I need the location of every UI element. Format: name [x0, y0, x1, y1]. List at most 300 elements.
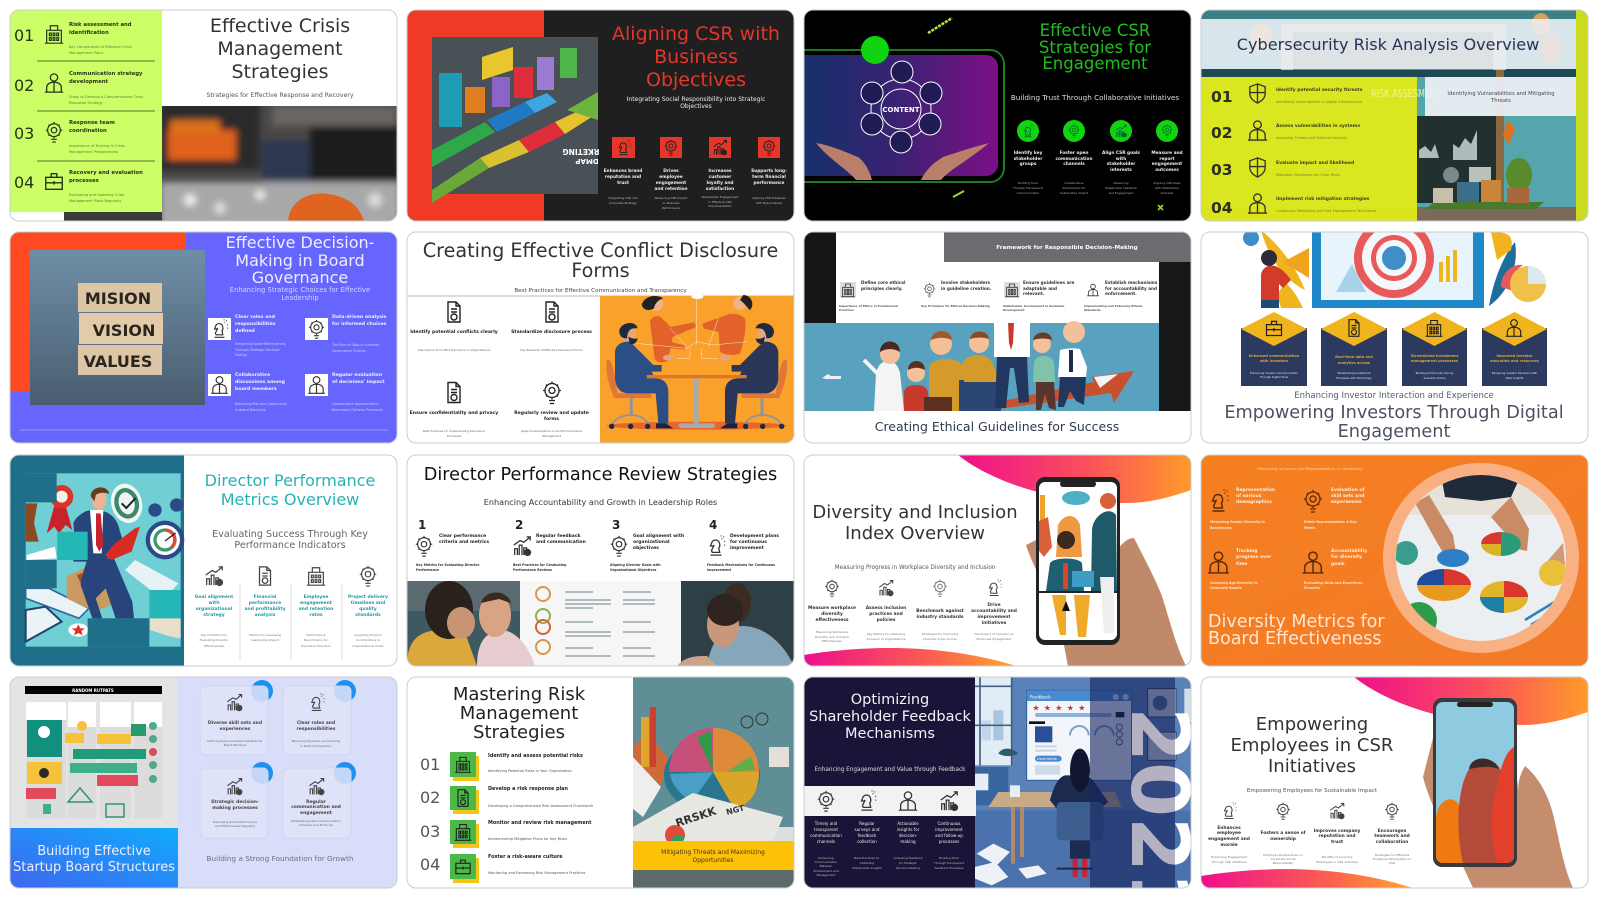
- panel: lime list column: [10, 10, 162, 221]
- item 03: 03: [1211, 161, 1233, 179]
- column 1: Enhancing Engagement: [1211, 855, 1247, 859]
- panel: Empowering Investors Through Digital Engagement: [1201, 218, 1588, 443]
- title: Effective Decision-: [226, 233, 374, 252]
- benefit 3: Implementation: [709, 204, 732, 208]
- strategy 2: Collaborative: [1064, 181, 1084, 185]
- title: Mastering Risk: [453, 684, 585, 705]
- item 2: Ethnic Representation: A Key: [1304, 520, 1357, 524]
- photo: wooden blocks mission vision values: VISION: [93, 321, 155, 340]
- benefit 2: on Business: [662, 201, 680, 205]
- benefit 3: satisfaction: [706, 186, 734, 192]
- column 2: Fosters a sense of: [1260, 831, 1306, 836]
- benefit 1: reputation and: [605, 174, 641, 180]
- glass card 4: [283, 762, 356, 838]
- photo: wooden blocks mission vision values: VALUES: [84, 352, 152, 371]
- item 03: [420, 820, 592, 848]
- column 1: Management: [816, 873, 836, 877]
- list item 03: Management Preparedness: [69, 150, 118, 154]
- list item 02: 02: [14, 76, 34, 95]
- step 2: [513, 518, 586, 572]
- column 1: [808, 580, 856, 643]
- strategy 2: Sustainable Impact: [1060, 191, 1089, 195]
- item 1: of various: [1236, 493, 1262, 499]
- metric 1: Evaluating Director: [200, 638, 229, 642]
- column 4: Strategies for Effective: [1375, 853, 1409, 857]
- feature card 4: Data Insights: [1506, 376, 1524, 380]
- item 1: demographics: [1236, 499, 1272, 505]
- item 1: Identify potential conflicts clearly: [410, 329, 498, 335]
- strategy 1: Identify key: [1014, 151, 1042, 156]
- subtitle box: Threats: [1490, 98, 1511, 104]
- step 1: criteria and metrics: [439, 539, 489, 545]
- glass card 1: experiences: [220, 726, 251, 732]
- column 3: [916, 580, 964, 641]
- step 2: 2: [515, 518, 523, 532]
- item 02: Assess vulnerabilities in systems: [1276, 123, 1360, 129]
- hand holding phone: [1026, 477, 1186, 666]
- glass card 4: communication and: [291, 804, 341, 810]
- benefit 4: Aligning CSR Initiatives: [752, 196, 786, 200]
- subtitle: Objectives: [680, 103, 712, 110]
- panel: Director Performance Review Strategies: [407, 455, 794, 666]
- strategy 4: Aligning CSR Goals: [1153, 181, 1181, 185]
- column 4: The Impact of Inclusion on: [974, 632, 1014, 636]
- item 01: 01: [1211, 88, 1233, 106]
- column 4: Encourages: [1378, 829, 1406, 834]
- benefit 2: employee: [659, 174, 683, 180]
- column 3: Employees in CSR Activities: [1316, 860, 1358, 864]
- illustration: woman reviewing feedback screen: Feedback: [1030, 695, 1051, 701]
- item 3: [208, 372, 287, 412]
- column 2: Inclusion in Organizations: [867, 637, 906, 641]
- item 4: for accountability and: [1105, 286, 1157, 291]
- column 3: [894, 821, 923, 870]
- column 3: trust: [1331, 839, 1343, 845]
- metric 3: [299, 568, 333, 648]
- column 2: feedback: [858, 833, 877, 838]
- glass card 4: Channels and Protocols: [299, 823, 333, 827]
- strategy 4: [1151, 120, 1183, 195]
- benefit 3: Increases: [708, 169, 732, 174]
- subtitle: Performance Indicators: [234, 540, 346, 551]
- benefit 4: with Brand Values: [756, 201, 783, 205]
- step 2: and communication: [536, 539, 586, 545]
- feature card 3: management processes: [1411, 359, 1458, 363]
- metric 4: Project delivery: [348, 595, 388, 600]
- list item 03: 03: [14, 124, 34, 143]
- list item 01: 01: [14, 26, 34, 45]
- column 4: Feedback Processes: [935, 866, 964, 870]
- column 3: Analyzing Feedback: [894, 856, 922, 860]
- column 2: Best Practices for: [854, 856, 880, 860]
- step 1: Key Metrics for Evaluating Director: [416, 563, 479, 567]
- step 1: Performance: [416, 568, 439, 572]
- hub diagram on gradient panel with hands: CONTENT: [882, 106, 920, 114]
- item 2: Standardize disclosure process: [511, 329, 592, 335]
- metric 3: Performance: [306, 633, 326, 637]
- list item 01: Risk assessment and: [69, 22, 132, 28]
- benefit 3: loyalty and: [707, 180, 733, 186]
- title: Director Performance Review Strategies: [424, 465, 777, 485]
- column 3: making: [900, 839, 916, 844]
- benefit 2: engagement: [656, 180, 686, 186]
- column 2: [852, 821, 882, 870]
- item 04: 04: [1211, 199, 1233, 217]
- item 3: adaptable and: [1023, 286, 1057, 291]
- title: Board Effectiveness: [1208, 629, 1381, 649]
- item 04: Implement risk mitigation strategies: [1276, 196, 1370, 202]
- list item 03: coordination: [69, 128, 107, 134]
- feature card 4: education and resources: [1490, 359, 1539, 363]
- title: Making in Board: [235, 251, 365, 270]
- step 4: for continuous: [730, 539, 767, 545]
- feature card 1: Enhanced communication: [1249, 354, 1299, 358]
- item 1: Boardrooms: [1210, 526, 1232, 530]
- item 4: [305, 372, 385, 412]
- title block: Startup Board Structures: [13, 860, 175, 875]
- strategy 2: channels: [1063, 161, 1085, 167]
- feature card 3: Investors Online: [1424, 376, 1446, 380]
- title: Mechanisms: [845, 726, 935, 742]
- benefit 3: customer: [709, 174, 732, 180]
- item 2: Involve stakeholders: [941, 280, 990, 285]
- title: Management: [217, 38, 343, 60]
- benefit 3: [702, 137, 739, 208]
- panel: Director Performance Metrics Overview: [10, 455, 397, 666]
- item 03: Evaluate impact and likelihood: [1276, 160, 1354, 166]
- title: Aligning CSR with: [612, 23, 780, 45]
- feature card 3: Building Community Among: [1416, 371, 1453, 375]
- yellow caption band: Opportunities: [693, 857, 733, 864]
- metric 4: timelines and: [351, 600, 385, 606]
- strategy 3: and Engagement: [1109, 191, 1134, 195]
- metric 4: Organizational Goals: [352, 644, 384, 648]
- feature card 2: [1321, 312, 1387, 386]
- column 1: Effectiveness: [822, 639, 842, 643]
- step 4: Feedback Mechanisms for Continuous: [707, 563, 775, 567]
- strategy 3: [1102, 120, 1140, 195]
- yellow caption band: [633, 841, 794, 870]
- illustration: monitor with target and megaphone: [1243, 218, 1546, 308]
- column 4: Drive: [987, 603, 1001, 608]
- item 1: [1210, 487, 1275, 530]
- title: Optimizing: [851, 692, 929, 708]
- item 3: Collaborative: [235, 373, 270, 378]
- item 3: in Board Decisions: [235, 408, 266, 412]
- title block: [10, 828, 178, 888]
- column 2: ownership: [1270, 836, 1296, 842]
- strategy 1: stakeholder: [1014, 156, 1043, 162]
- benefit 3: Stakeholder Engagement: [702, 195, 738, 199]
- column 3: [1314, 804, 1361, 864]
- item 1: Enhancing Board Effectiveness: [235, 342, 286, 346]
- subtitle: Measuring Inclusion and Representation in Leadership: [1257, 466, 1363, 471]
- item 1: Measuring Gender Diversity in: [1210, 520, 1265, 524]
- strategy 2: Foster open: [1060, 151, 1088, 156]
- title: Director Performance: [205, 471, 375, 490]
- strategy 2: Partnerships for: [1063, 186, 1086, 190]
- metric 4: [348, 566, 388, 648]
- glass card 1: [200, 680, 273, 755]
- step 3: 3: [612, 518, 620, 532]
- column 1: Shareholders and: [813, 869, 839, 873]
- column 1: morale: [1220, 842, 1238, 848]
- strategy 4: report: [1159, 156, 1175, 162]
- hand holding phone with portrait: [1423, 698, 1573, 888]
- item 2: experiences: [1331, 499, 1362, 505]
- illustration: team on arrow: [804, 321, 1159, 411]
- item 4: goals: [1331, 561, 1345, 567]
- column 3: Decision-Making: [896, 866, 920, 870]
- column 4: CSR: [1389, 861, 1395, 865]
- column 4: Employee Engagement: [977, 637, 1012, 641]
- column 1: communication: [810, 833, 842, 838]
- item 02: 02: [1211, 124, 1233, 142]
- item 2: in guideline creation.: [941, 286, 992, 291]
- item 1: [208, 314, 286, 357]
- item 1: Define core ethical: [861, 280, 905, 285]
- metric 4: Analyzing Director: [354, 633, 382, 637]
- title: Engagement: [1042, 54, 1148, 73]
- column 4: Employee Participation in: [1373, 857, 1411, 861]
- metric 4: standards: [355, 612, 381, 618]
- subtitle: Enhancing Engagement and Value through Feedback: [815, 767, 966, 773]
- benefit 2: Performance: [662, 206, 680, 210]
- yellow list panel: RISK ASSESMENT: [1371, 88, 1441, 100]
- item 2: Evaluation of: [1331, 488, 1364, 493]
- strategy 4: engagement: [1152, 161, 1182, 167]
- item 04: Continuous Monitoring and Risk Management Techniques: [1276, 209, 1377, 213]
- item 4: [1303, 548, 1368, 590]
- item 1: [410, 302, 498, 352]
- list item 03: [14, 120, 125, 154]
- photo: wooden blocks mission vision values: [30, 250, 205, 405]
- strategy 3: Align CSR goals: [1102, 151, 1140, 156]
- item 1: Representation: [1236, 488, 1275, 493]
- subtitle: Measuring Progress in Workplace Diversity and Inclusion: [835, 565, 996, 571]
- icon band: [804, 786, 976, 816]
- yellow caption band: Mitigating Threats and Maximizing: [661, 849, 765, 856]
- title: Effective Crisis: [210, 15, 350, 37]
- item 01: 01: [420, 755, 440, 774]
- column 3: Actionable: [897, 821, 919, 826]
- column 2: [1260, 803, 1306, 865]
- strategy 1: Through Transparent: [1012, 186, 1044, 190]
- feature card 2: Streamlining Investment: [1337, 371, 1371, 375]
- glass card 3: Strategic decision-: [211, 800, 259, 805]
- benefit 2: and retention: [654, 186, 688, 192]
- column 2: Responsibility: [1273, 861, 1294, 865]
- metric 2: Leadership Impact: [251, 638, 280, 642]
- glass card 3: making processes: [212, 805, 258, 811]
- item 02: Developing a Comprehensive Risk Assessment Framework: [488, 804, 594, 808]
- photo: 3D pie chart on desk: NGT: [725, 803, 746, 817]
- strategy 4: outcomes: [1155, 167, 1179, 173]
- panel: Effective CSR Strategies for Engagement: [789, 10, 1191, 221]
- item 4: Standards: [1084, 308, 1101, 312]
- benefit 4: Supports long-: [751, 169, 787, 174]
- column 4: [933, 821, 965, 870]
- decorative gradient blobs: [1201, 677, 1588, 888]
- illustration: negotiation at table: [600, 294, 794, 443]
- item 2: [1304, 487, 1364, 530]
- metric 4: Contributions to: [356, 638, 380, 642]
- title: Shareholder Feedback: [809, 709, 971, 725]
- column 4: Building Trust: [939, 856, 959, 860]
- step 3: Organizational Objectives: [610, 568, 657, 572]
- column 2: [866, 580, 906, 641]
- item 04: [1211, 194, 1377, 217]
- benefit 2: [654, 137, 688, 210]
- illustration: kanban-style board: [10, 677, 178, 828]
- list item 01: Management Plans: [69, 51, 103, 55]
- title: Forms: [571, 259, 630, 282]
- strategy 1: groups: [1020, 161, 1037, 167]
- photo: wooden blocks mission vision values: MISION: [85, 289, 151, 308]
- column 2: Collecting: [860, 861, 874, 865]
- title: Business: [654, 46, 738, 68]
- subtitle: Best Practices for Effective Communication and Transparency: [514, 288, 687, 294]
- feature card 1: with investors: [1260, 359, 1288, 363]
- feature card 2: Processes with Technology: [1336, 376, 1372, 380]
- item 2: skill sets and: [1331, 493, 1364, 499]
- step 3: [610, 518, 684, 572]
- strategy 4: Interests: [1161, 191, 1174, 195]
- column 1: Enhancing: [818, 856, 834, 860]
- item 1: defined: [235, 328, 255, 334]
- strategy 3: stakeholder: [1107, 161, 1136, 167]
- item 3: Ensure guidelines are: [1023, 280, 1074, 285]
- item 3: [1003, 280, 1074, 312]
- item 4: Regularly review and update: [514, 411, 589, 416]
- item 4: Collaborative Approaches to: [332, 402, 379, 406]
- list item 01: identification: [69, 30, 109, 36]
- panel: Aligning CSR with Business Objectives: [407, 10, 794, 221]
- oval photo: hands over pie charts: [1383, 463, 1579, 653]
- strategy 2: communication: [1055, 156, 1093, 162]
- metric 1: with: [208, 600, 220, 606]
- item 02: Develop a risk response plan: [488, 786, 568, 792]
- item 4: Boardroom Decision Processes: [332, 408, 383, 412]
- column 4: Continuous: [937, 821, 961, 826]
- item 1: responsibilities: [235, 321, 276, 327]
- item 1: Clear roles and: [235, 315, 275, 320]
- item 04: Foster a risk-aware culture: [488, 854, 563, 860]
- item 1: Through Strategic Decision: [234, 348, 280, 352]
- benefit 4: term financial: [752, 174, 786, 180]
- column 4: accountability and: [971, 608, 1017, 614]
- column 4: [1373, 803, 1411, 865]
- metric 1: organizational: [196, 606, 233, 612]
- metric 1: strategy: [203, 612, 225, 618]
- item 2: Data-driven analysis: [332, 315, 386, 320]
- title band: Cybersecurity Risk Analysis Overview: [1237, 35, 1539, 54]
- column 1: Timely and: [815, 821, 837, 826]
- glass card 3: Evaluating Board Performance: [213, 820, 257, 824]
- metric 2: Metrics for Assessing: [249, 633, 281, 637]
- item 3: relevant.: [1023, 291, 1045, 296]
- subtitle: Integrating Social Responsibility into Strategic: [627, 96, 765, 103]
- item 2: [511, 302, 592, 352]
- column 1: Communication: [815, 860, 838, 864]
- item 4: Regular evaluation: [332, 373, 382, 378]
- column 2: practices and: [869, 611, 903, 617]
- item 4: Implementing and Enforcing Ethical: [1084, 304, 1142, 308]
- title: Diversity Metrics for: [1208, 612, 1385, 632]
- feature card 4: Improved investor: [1496, 354, 1533, 358]
- item 02: [420, 786, 594, 814]
- item 4: of decisions' impact: [332, 379, 385, 385]
- strategy 4: with Stakeholder: [1155, 186, 1180, 190]
- benefit 1: Corporate Strategy: [609, 201, 637, 205]
- photo: isometric roadmap blocks: RKETING: [562, 147, 600, 156]
- glass card 1: Defining Roles and Responsibilities for: [207, 739, 263, 743]
- item 03: Monitor and review risk management: [488, 820, 592, 826]
- column 4: initiatives: [982, 620, 1007, 626]
- subtitle: Enhancing Strategic Choices for Effective: [230, 286, 370, 294]
- item 02: [1211, 121, 1360, 142]
- list item 04: processes: [69, 178, 99, 184]
- column 3: Benefits of Involving: [1322, 855, 1352, 859]
- subtitle: Building a Strong Foundation for Growth: [207, 854, 353, 863]
- item 04: [420, 854, 586, 883]
- list item 04: 04: [14, 173, 34, 192]
- illustration: director reading with clocks: [10, 473, 184, 647]
- glass card 4: Establishing Clear Communication: [291, 819, 341, 823]
- column 1: Through CSR Initiatives: [1210, 860, 1247, 864]
- illustration: woman reviewing feedback screen: Comments: [1037, 757, 1057, 761]
- list item 01: Key Components of Effective Crisis: [69, 45, 132, 49]
- item 3: discussions among: [235, 379, 285, 385]
- column 2: Employee Perspectives on: [1263, 853, 1303, 857]
- column 2: Shareholder Insights: [852, 866, 882, 870]
- title: Creating Ethical Guidelines for Success: [875, 419, 1119, 434]
- title: Objectives: [646, 69, 746, 91]
- item 3: Ensure confidentiality and privacy: [410, 410, 498, 416]
- item 1: Importance of Conflict Disclosure in Organizations: [418, 348, 491, 352]
- step 4: [707, 518, 779, 572]
- list item 02: [14, 71, 143, 105]
- metric 4: quality: [359, 606, 377, 612]
- column 4: collaboration: [1376, 839, 1408, 845]
- item 4: enforcement.: [1105, 291, 1137, 296]
- feature card 1: Enhancing Investor Communication: [1250, 371, 1298, 375]
- feature card 4: Equipping Investor Decisions with: [1492, 371, 1537, 375]
- subtitle: Empowering Employees for Sustainable Impact: [1247, 788, 1378, 794]
- column 4: [971, 580, 1017, 641]
- strategy 1: Communication: [1017, 191, 1040, 195]
- item 2: [921, 280, 992, 308]
- illustration: kanban-style board: RANDOM RUTPATS: [72, 688, 114, 693]
- benefit 1: Enhances brand: [604, 169, 642, 174]
- column 3: Strategies for Improving: [922, 632, 958, 636]
- feature card 1: Through Digital Tools: [1259, 375, 1289, 379]
- column 1: engagement and: [1208, 836, 1250, 842]
- item 04: Monitoring and Reviewing Risk Management Practices: [488, 871, 586, 875]
- metric 3: Benchmarks for: [304, 638, 329, 642]
- photo: men reviewing a report: [407, 581, 794, 666]
- list item 04: Management Plans Regularly: [69, 199, 122, 203]
- metric 2: analysis: [255, 612, 276, 618]
- item 3: Best Practices for Implementing Disclosure: [423, 429, 485, 433]
- step 3: objectives: [633, 545, 659, 551]
- subtitle: Leadership: [281, 294, 319, 302]
- column 4: processes: [939, 839, 959, 844]
- glass card 2: responsibilities: [297, 726, 336, 732]
- strategy 3: Stakeholder Feedback: [1105, 186, 1137, 190]
- column 4: teamwork and: [1374, 833, 1410, 839]
- column 1: channels: [817, 839, 835, 844]
